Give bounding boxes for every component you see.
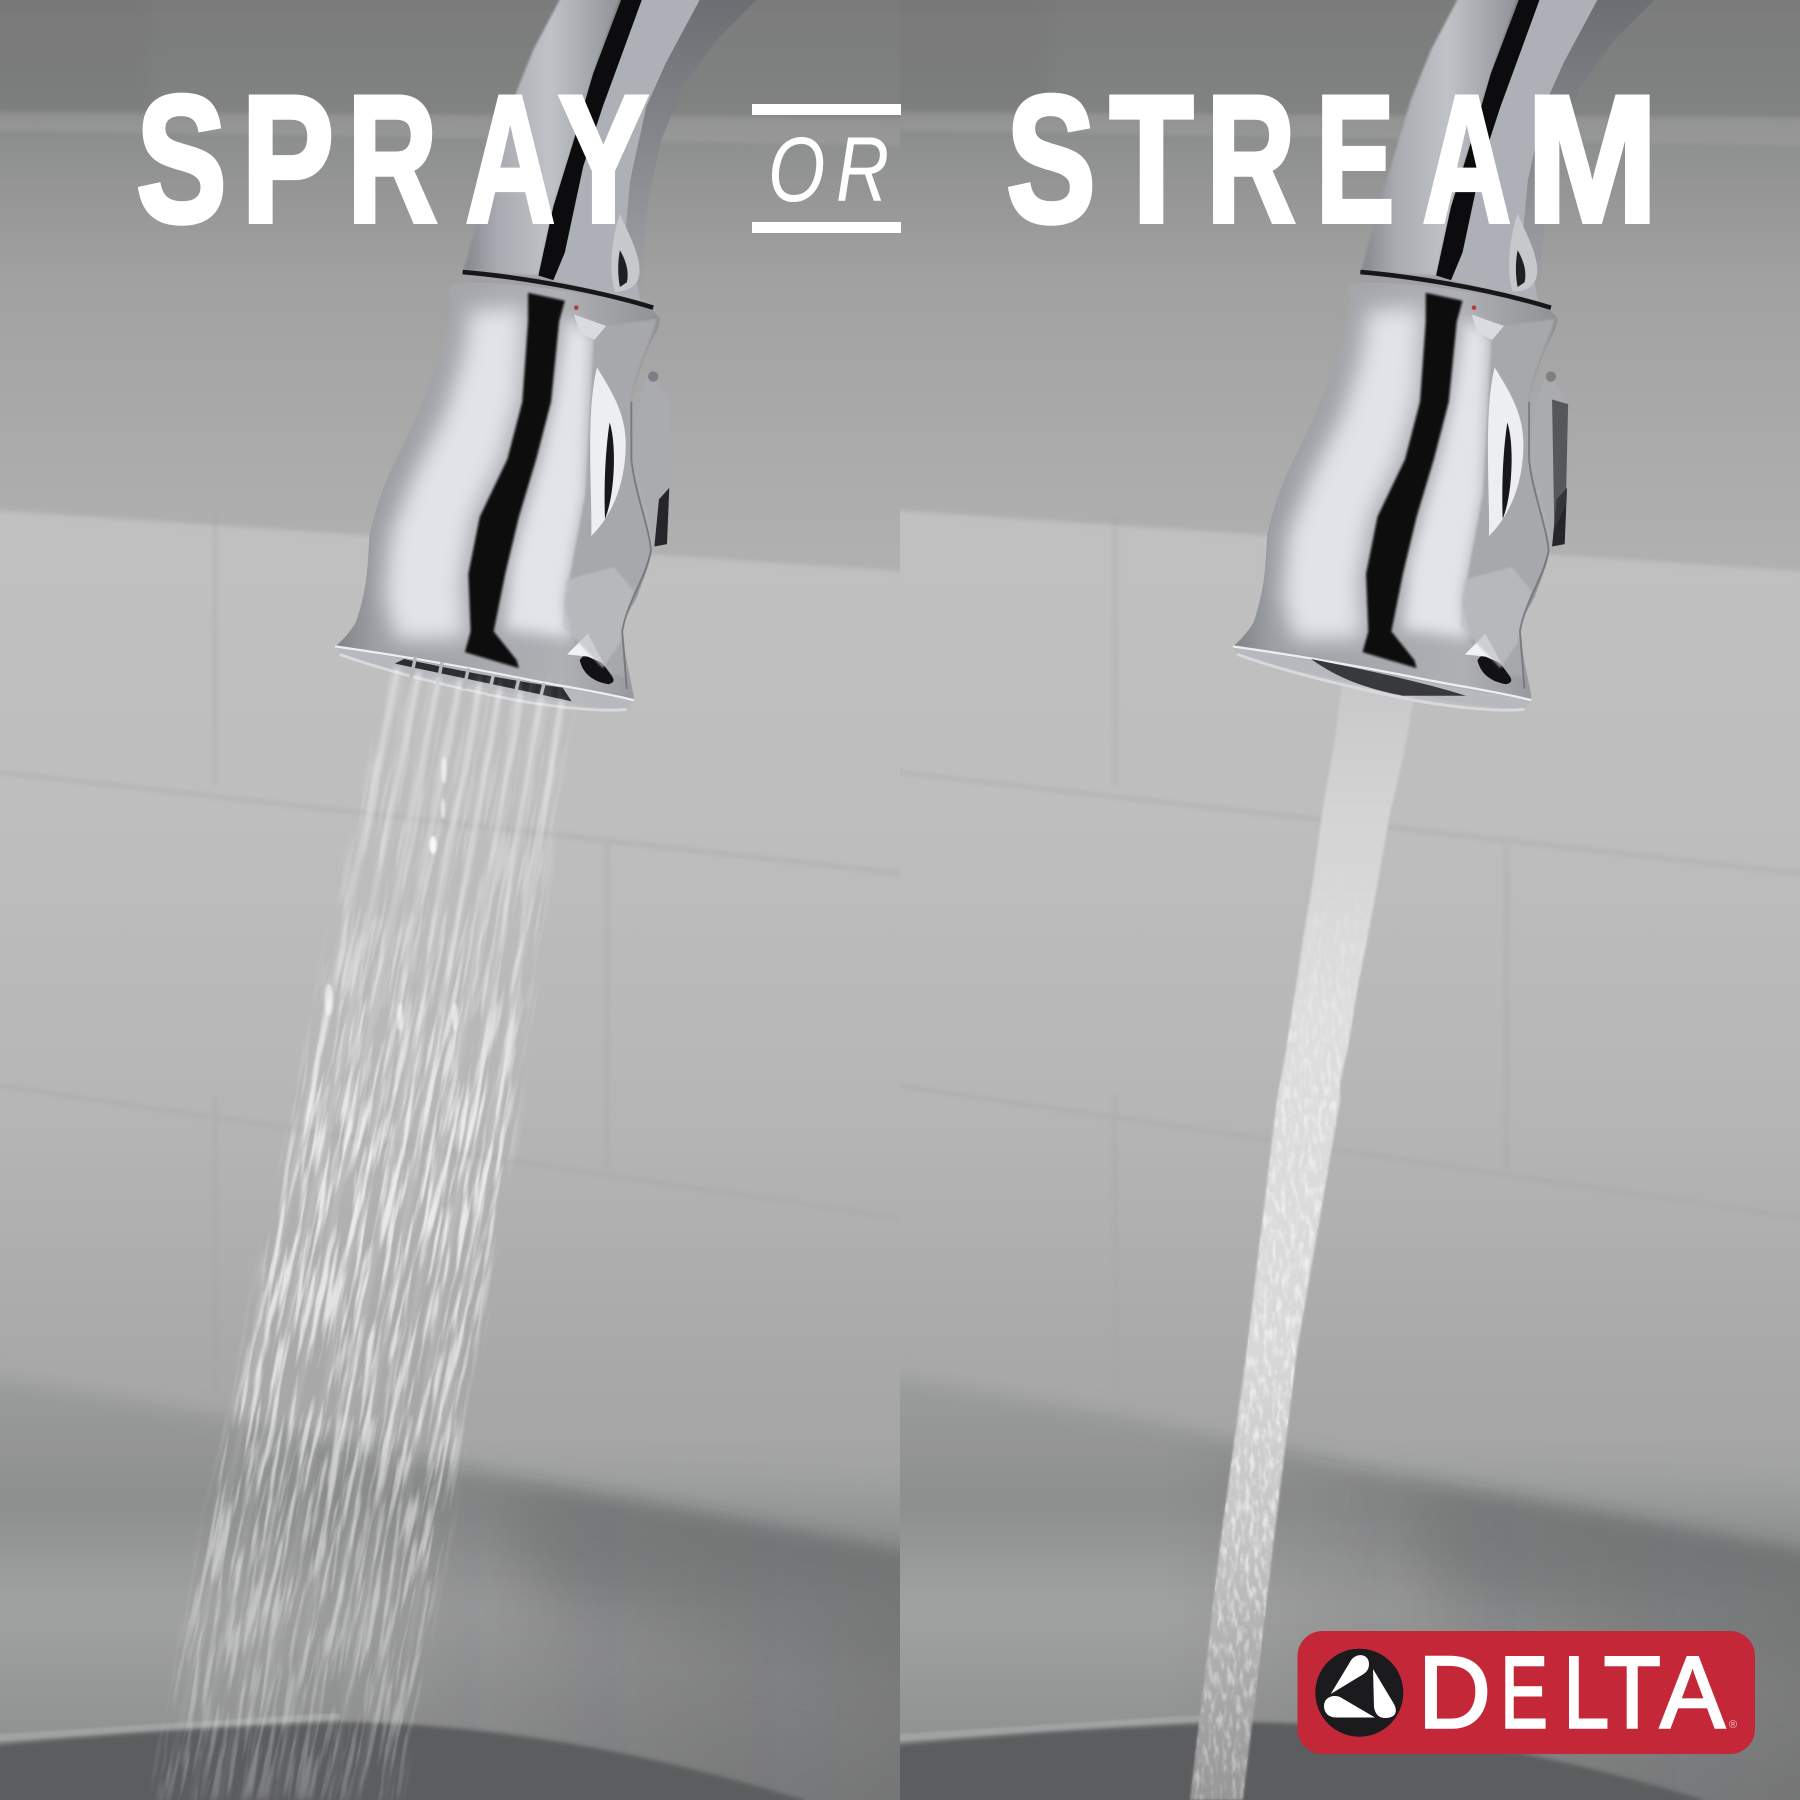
title: spray: Y	[558, 58, 648, 260]
water: solid stream	[1189, 686, 1414, 1800]
title: stream: M	[1526, 58, 1658, 260]
logo: Delta badge	[1298, 1631, 1755, 1754]
logo wordmark: E	[1500, 1636, 1548, 1750]
logo wordmark: T	[1604, 1636, 1661, 1750]
panel: spray	[0, 0, 960, 1800]
logo wordmark: L	[1563, 1636, 1609, 1750]
registered mark: ®	[1729, 1719, 1737, 1731]
or divider: OR	[768, 118, 889, 221]
logo wordmark: D	[1418, 1636, 1491, 1750]
icon: Delta tri-drop mark	[1315, 1649, 1403, 1737]
faucet: stream head	[1233, 0, 1654, 710]
title: stream: E	[1316, 58, 1394, 260]
title: spray: R	[347, 58, 437, 260]
title: stream: A	[1422, 58, 1511, 260]
logo wordmark: A	[1660, 1636, 1725, 1750]
faucet: spray head	[335, 0, 757, 710]
title: stream: R	[1206, 58, 1295, 260]
title: spray: P	[241, 58, 334, 260]
title: stream: S	[1006, 58, 1096, 260]
title: stream: T	[1110, 58, 1194, 260]
or divider	[752, 104, 901, 233]
background: wall tiles and counter, left	[0, 0, 960, 1800]
water: spray jets	[154, 667, 566, 1800]
panel: stream	[840, 0, 1800, 1800]
background: wall tiles and counter, right	[840, 0, 1800, 1800]
title: spray: S	[136, 58, 227, 260]
title: spray: A	[466, 58, 555, 260]
